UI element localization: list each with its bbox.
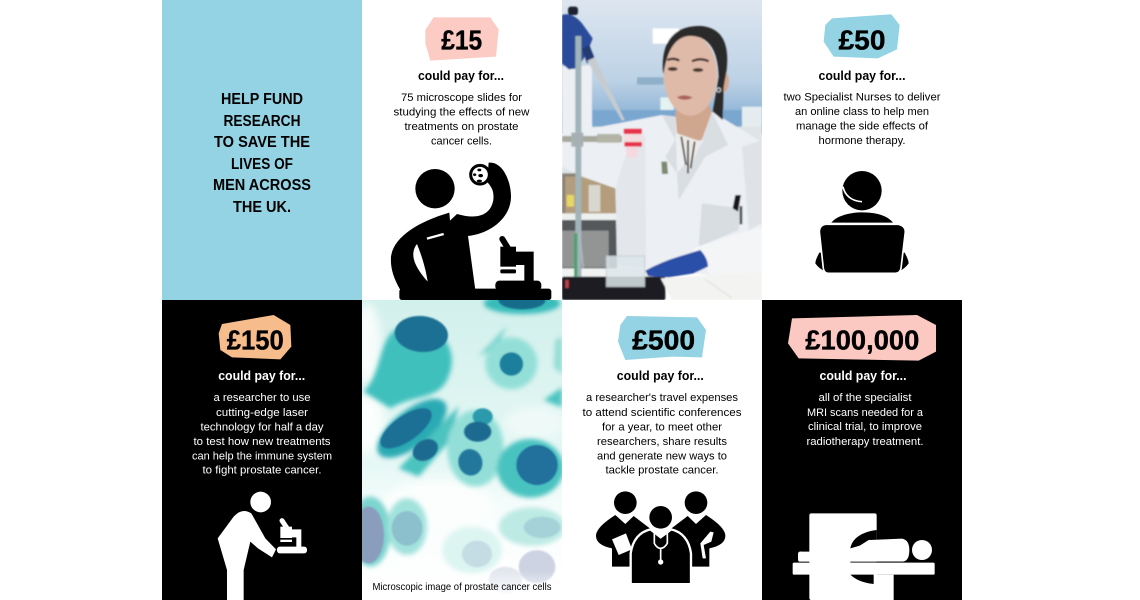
subheading: could pay for: could pay for... xyxy=(820,369,906,383)
text: £50 description: an online class to help men xyxy=(795,106,929,118)
text: £150 description: to fight prostate cancer. xyxy=(202,464,322,476)
subheading: could pay for: could pay for... xyxy=(818,69,906,83)
pipette xyxy=(587,57,625,121)
subheading: could pay for: could pay for... xyxy=(617,369,704,383)
text: £150 description: technology for half a day xyxy=(200,422,324,434)
heading: help fund research: TO SAVE THE xyxy=(214,134,310,151)
panel: £15 xyxy=(362,0,562,300)
price badge: £500 xyxy=(618,316,706,360)
price badge: £15: £15 xyxy=(441,24,482,56)
pen xyxy=(733,195,741,212)
heading: help fund research: RESEARCH xyxy=(224,113,300,130)
icon: nurse with headset at laptop xyxy=(815,171,909,273)
price badge: £100,000 xyxy=(788,315,936,361)
text: £500 description: to attend scientific conferences xyxy=(582,407,742,419)
text: £500 description: researchers, share results xyxy=(597,436,727,448)
price badge: £15 xyxy=(425,17,499,61)
plastic box xyxy=(606,256,645,287)
raised glove xyxy=(562,14,593,69)
icon: three medical professionals xyxy=(596,491,725,588)
price badge: £100,000: £100,000 xyxy=(805,324,919,356)
text: £100,000 description: MRI scans needed for a xyxy=(807,407,924,419)
text: £15 description: studying the effects of new xyxy=(394,106,530,118)
paper xyxy=(661,272,762,300)
panel: £150 xyxy=(162,300,362,600)
subheading: could pay for: could pay for... xyxy=(418,69,504,83)
text: £150 description: to test how new treatments xyxy=(194,436,331,448)
heading: help fund research: LIVES OF xyxy=(231,156,293,173)
text: £500 description: tackle prostate cancer. xyxy=(606,464,718,476)
text: £150 description: cutting-edge laser xyxy=(216,407,308,419)
panel: headline xyxy=(162,0,362,300)
subheading: could pay for: could pay for... xyxy=(218,369,305,383)
text: £100,000 description: all of the specialist xyxy=(818,392,912,404)
text: £15 description: cancer cells. xyxy=(431,136,492,148)
text: £150 description: a researcher to use xyxy=(214,392,310,404)
price badge: £50 xyxy=(824,14,900,58)
heading: help fund research xyxy=(213,91,311,216)
text: £150 description xyxy=(192,392,332,476)
red holder xyxy=(624,129,642,134)
icon: scientist with petri dish and microscope xyxy=(391,163,551,300)
text: £500 description: and generate new ways to xyxy=(597,450,727,462)
text: £150 description: can help the immune system xyxy=(192,450,332,462)
text: £100,000 description: clinical trial, to improve xyxy=(808,421,922,433)
price badge: £150 xyxy=(219,315,291,359)
price badge: £150: £150 xyxy=(227,324,284,356)
heading: help fund research: HELP FUND xyxy=(221,91,303,108)
price badge: £50: £50 xyxy=(838,24,886,56)
text: £500 description: a researcher's travel expenses xyxy=(586,392,738,404)
panel: £50 xyxy=(762,0,962,300)
photo: microscopic image of prostate cancer cells xyxy=(349,292,565,600)
photo: researcher using a pipette xyxy=(562,0,762,300)
text: £500 description: for a year, to meet other xyxy=(602,422,722,434)
text: £500 description xyxy=(582,392,742,476)
panel: £100,000 xyxy=(762,300,962,600)
text: £15 description xyxy=(394,92,530,148)
icon: patient in MRI scanner xyxy=(793,513,935,600)
coat xyxy=(562,65,762,275)
text: £50 description: two Specialist Nurses to deliver xyxy=(784,92,941,104)
panel: £500 xyxy=(562,300,762,600)
price badge: £500: £500 xyxy=(632,324,695,356)
face xyxy=(664,34,717,116)
text: £50 description xyxy=(784,92,941,147)
icon: person at microscope xyxy=(218,492,307,600)
heading: help fund research: MEN ACROSS xyxy=(213,177,311,194)
neck xyxy=(674,105,713,142)
text: £100,000 description xyxy=(806,392,924,448)
text: £50 description: manage the side effects of xyxy=(796,120,929,132)
text: £15 description: 75 microscope slides for xyxy=(401,92,522,104)
text: £50 description: hormone therapy. xyxy=(818,135,906,147)
heading: help fund research: THE UK. xyxy=(233,199,291,216)
lower glove xyxy=(645,250,708,277)
stand xyxy=(575,36,581,277)
text: £15 description: treatments on prostate xyxy=(404,121,518,133)
caption: microscopic image: Microscopic image of prostate cancer cells xyxy=(372,582,552,593)
text: £100,000 description: radiotherapy treatment. xyxy=(806,436,924,448)
